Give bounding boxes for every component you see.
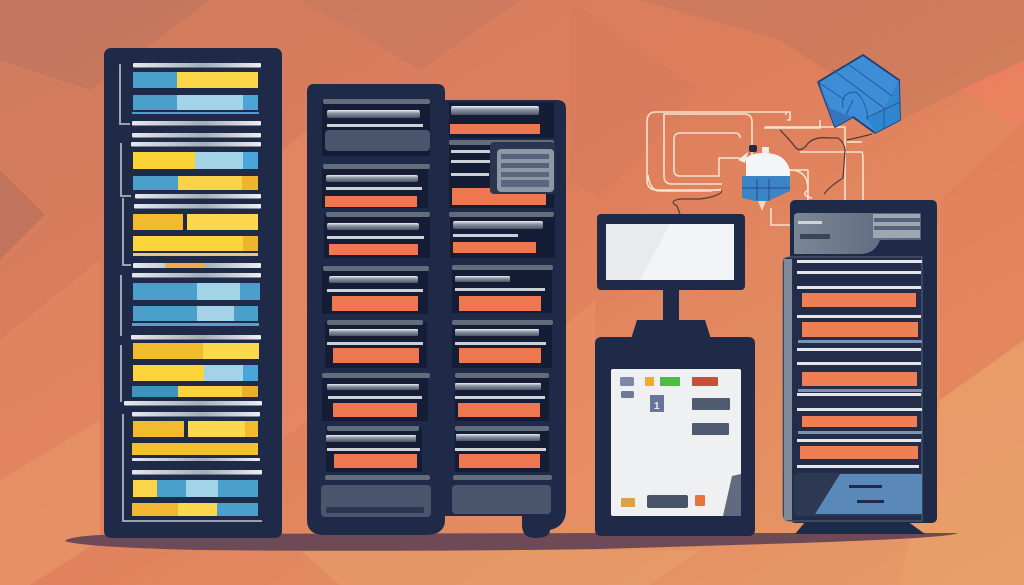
cabinet indicators: 1: [654, 401, 660, 412]
rack frame rails: [120, 65, 262, 521]
mounted unit: [490, 142, 555, 194]
small blue cube node: [738, 145, 790, 211]
top panel: [794, 213, 921, 254]
bars row 9-11: [132, 343, 259, 397]
silver handles: [451, 106, 543, 441]
bars row 14-15: [132, 480, 258, 516]
thin lines: [451, 150, 546, 451]
monitor: [597, 214, 745, 339]
large blue cube: [818, 55, 900, 133]
drive bays: [797, 260, 922, 468]
orange drive bars: [325, 196, 419, 468]
module bands: [449, 140, 554, 480]
module insets: [322, 100, 430, 472]
dark wires: [673, 130, 872, 214]
bars row 12-13: [132, 421, 258, 455]
cabinet indicators: [620, 377, 730, 508]
slate panel: [452, 485, 551, 514]
base blue panel: [794, 473, 922, 516]
bars row 3-4: [133, 152, 258, 190]
bars row 5-6: [133, 214, 258, 251]
bars row 7-8: [132, 283, 260, 326]
control cabinet: [595, 337, 755, 536]
tower 2: left grey rack: [307, 84, 445, 535]
chrome frame: [783, 257, 922, 521]
module insets: [449, 102, 555, 472]
tower 3: right grey rack: [445, 100, 566, 538]
silver handles: [326, 110, 420, 442]
bars row 1-2: [132, 72, 259, 114]
orange drive bars: [450, 124, 546, 468]
ground shadow: [65, 533, 958, 551]
right server tower: [783, 200, 937, 534]
silver dividers: [124, 63, 262, 474]
tower 1: blue and yellow rack: [104, 48, 282, 538]
thin lines: [326, 124, 424, 451]
network wires: [647, 112, 863, 225]
slate panels: [325, 130, 430, 151]
module bands: [322, 99, 430, 480]
